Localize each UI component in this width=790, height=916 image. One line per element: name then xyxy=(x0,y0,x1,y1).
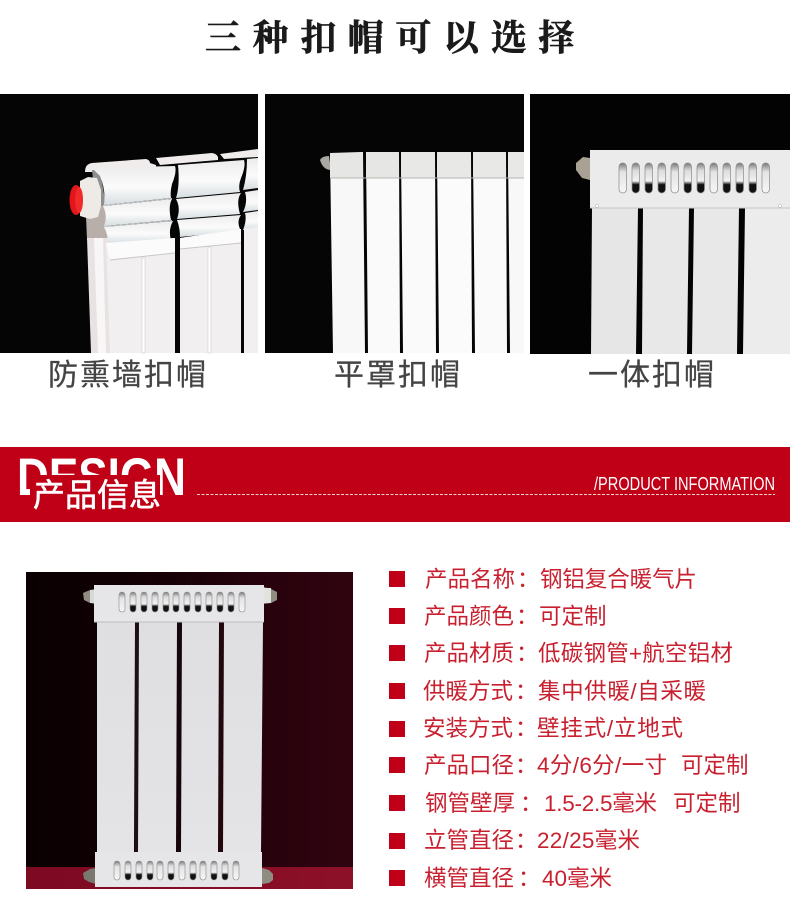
section banner xyxy=(0,447,790,522)
spec: product name: 钢铝复合暖气片 xyxy=(540,567,697,592)
spec: material xyxy=(389,641,733,666)
spec: port size xyxy=(389,753,749,778)
spec: riser diameter: 立管直径： xyxy=(424,828,538,853)
icon: red plug xyxy=(70,177,101,219)
cap fins: first section xyxy=(85,159,176,244)
spec: riser diameter: 22/25毫米 xyxy=(537,828,640,853)
spec: product name: 产品名称： xyxy=(425,567,540,592)
spec: installation: 壁挂式/立地式 xyxy=(537,716,683,741)
icon: valve nut xyxy=(320,156,331,170)
label: flat cover cap: 平罩扣帽 xyxy=(334,359,462,392)
integrated cap vent band xyxy=(590,150,790,208)
spec: wall thickness xyxy=(389,791,741,816)
spec: product colour: 可定制 xyxy=(539,604,607,629)
product photo xyxy=(26,572,353,889)
spec: wall thickness: 钢管壁厚： xyxy=(425,791,543,816)
spec: riser diameter xyxy=(389,828,640,853)
icon: wall-side bracket xyxy=(86,200,112,353)
bottom vent band xyxy=(95,852,262,887)
photo floor xyxy=(26,867,353,889)
flat cap columns xyxy=(330,152,524,353)
spec: wall thickness: 1.5-2.5毫米 xyxy=(544,791,657,816)
spec: product name xyxy=(389,567,697,592)
top vent band xyxy=(94,585,264,622)
icon: valve nut xyxy=(576,157,590,180)
banner dashed rule xyxy=(197,494,775,496)
valve nuts xyxy=(83,587,277,884)
spec: header diameter: 横管直径： xyxy=(424,866,541,891)
spec: installation xyxy=(389,716,683,741)
spec: product colour: 产品颜色： xyxy=(424,604,539,629)
spec: heating method: 集中供暖/自采暖 xyxy=(538,679,706,704)
spec: heating method: 供暖方式： xyxy=(423,679,538,704)
radiator columns xyxy=(97,622,263,852)
cap fins: third section xyxy=(220,149,258,230)
title: 三种扣帽可以选择 xyxy=(205,18,586,58)
spec: heating method xyxy=(389,679,706,704)
product specification list xyxy=(389,567,749,891)
spec: header diameter: 40毫米 xyxy=(542,866,612,891)
radiator columns xyxy=(106,227,258,353)
label: anti-smoke wall cap: 防熏墙扣帽 xyxy=(48,359,208,392)
spec: installation: 安装方式： xyxy=(423,716,538,741)
spec: header diameter xyxy=(389,866,612,891)
spec: wall thickness: 可定制 xyxy=(673,791,741,816)
spec: material: 产品材质： xyxy=(424,641,539,666)
panel: anti-smoke wall cap xyxy=(0,94,258,353)
spec: port size: 4分/6分/一寸 xyxy=(537,753,667,778)
banner heading: 产品信息 xyxy=(33,477,161,513)
spec: port size: 可定制 xyxy=(681,753,749,778)
banner background word: DESIGN xyxy=(17,448,186,507)
spec: material: 低碳钢管+航空铝材 xyxy=(538,641,733,666)
spec: port size: 产品口径： xyxy=(424,753,538,778)
banner word knockout xyxy=(30,475,160,517)
panel: integrated cap xyxy=(530,94,790,354)
spec: product colour xyxy=(389,604,607,629)
cap fins: second section xyxy=(156,153,245,237)
integrated cap columns xyxy=(591,208,790,354)
panel: flat cover cap xyxy=(265,94,524,353)
label: integrated cap: 一体扣帽 xyxy=(588,359,716,392)
